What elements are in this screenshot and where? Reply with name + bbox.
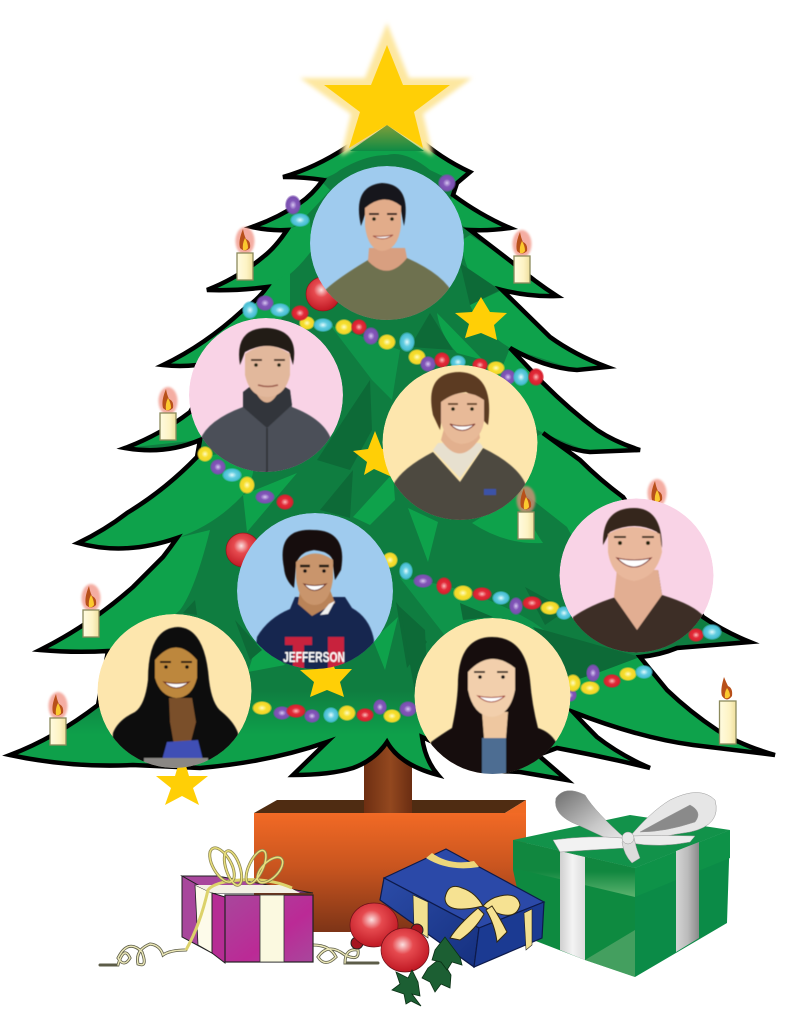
candle: centre right bbox=[516, 486, 536, 539]
portrait 2: young man in grey zip sweater bbox=[189, 318, 343, 473]
gold bow bbox=[445, 886, 520, 942]
ornament: star centre bbox=[353, 431, 402, 477]
portrait 6: young woman with long dark hair bbox=[98, 614, 252, 772]
hoodie lettering: JEFFERSON bbox=[283, 649, 345, 666]
medium light bands bbox=[310, 228, 544, 634]
candle: bottom right bbox=[720, 677, 736, 744]
candle: lower left bbox=[82, 584, 100, 637]
ornament: star lower centre bbox=[300, 650, 352, 697]
dark wedges bbox=[183, 264, 638, 692]
holly leaves bbox=[392, 937, 462, 1006]
lower tier fading light band bbox=[18, 700, 570, 776]
silver bow bbox=[553, 791, 716, 863]
tree-top star bbox=[300, 23, 472, 156]
portrait 1: young man in olive t-shirt bbox=[310, 166, 464, 322]
candle: upper right bbox=[512, 230, 532, 283]
portrait 4: young man in dark v-neck shirt bbox=[560, 498, 714, 655]
gold bow bbox=[205, 844, 287, 887]
portrait 7: young woman with long black hair bbox=[414, 618, 570, 776]
candle: upper left bbox=[236, 227, 254, 280]
tree foliage bbox=[0, 128, 780, 790]
tree trunk bbox=[364, 735, 412, 817]
portrait 5: young man in Jefferson hoodie bbox=[237, 513, 393, 670]
ornament: star bottom left bbox=[156, 752, 208, 805]
ornament: star upper right bbox=[455, 297, 507, 340]
gift: blue box with gold bow bbox=[380, 849, 544, 967]
flower pot bbox=[254, 780, 526, 932]
curling ribbon bbox=[100, 944, 378, 965]
portrait 3: young man in brown v-neck sweater bbox=[382, 365, 538, 521]
ornament: red bauble upper bbox=[306, 277, 340, 311]
ornament: red bauble lower bbox=[226, 533, 260, 567]
candle: mid left bbox=[158, 387, 178, 440]
gift: purple box with white ribbon bbox=[100, 844, 378, 965]
red baubles bbox=[350, 903, 429, 972]
gift: large green box with silver ribbon bbox=[513, 791, 730, 977]
light branch tips bbox=[48, 144, 708, 726]
candle flame: behind right portrait bbox=[648, 479, 666, 507]
candle: bottom left bbox=[48, 692, 68, 745]
light garlands bbox=[197, 174, 722, 723]
